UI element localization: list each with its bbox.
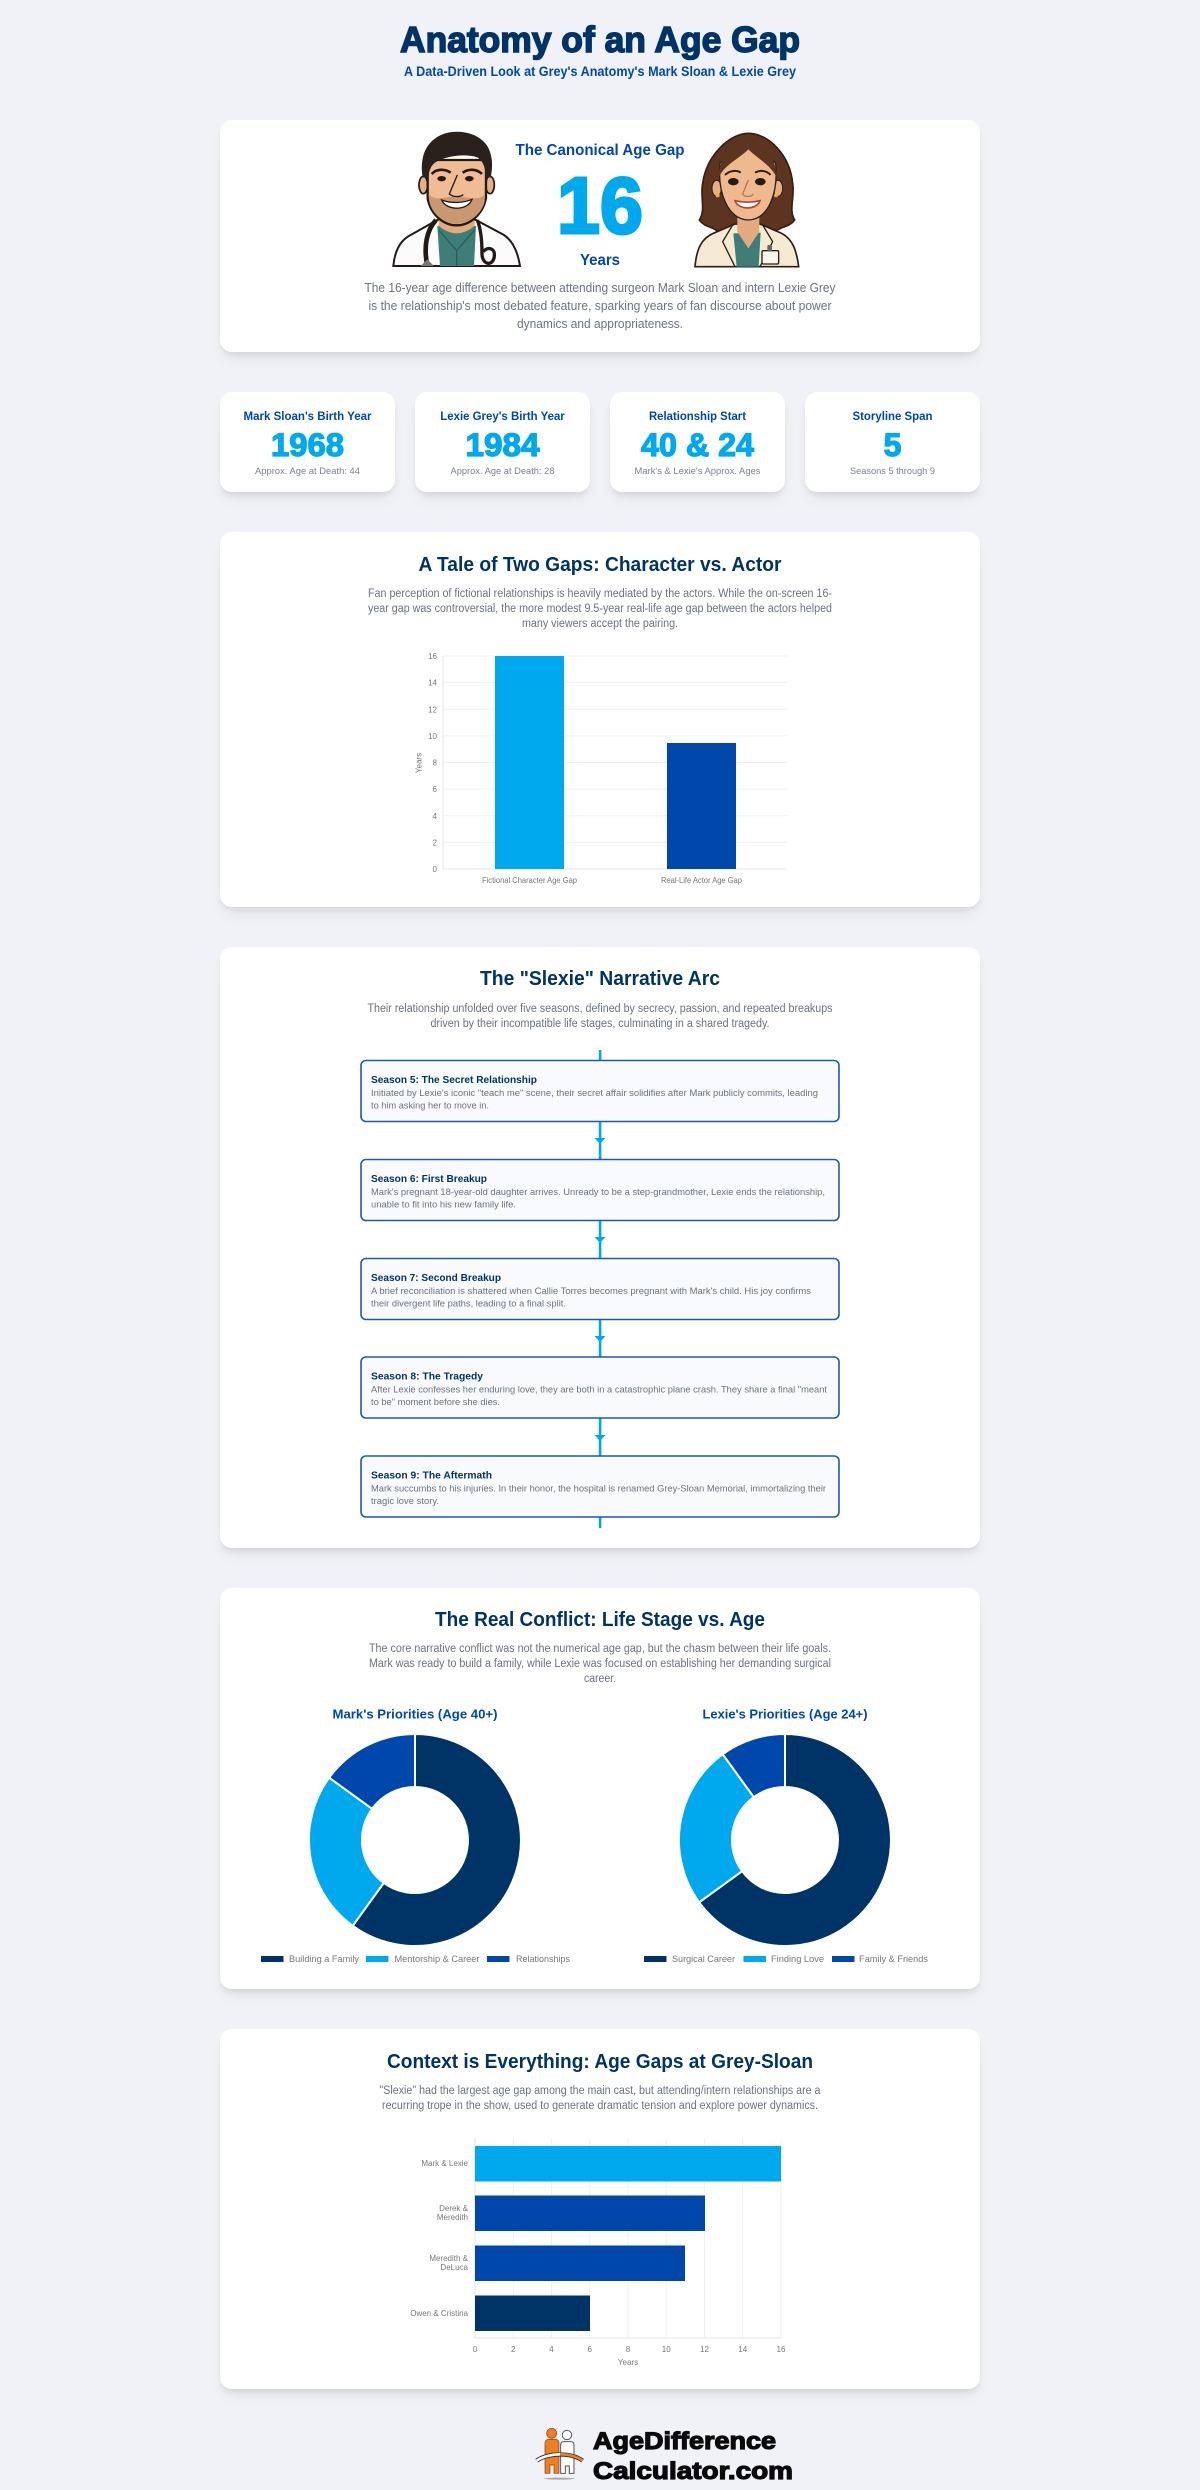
- horizontal bar chart: age gaps: 6: [588, 2345, 593, 2354]
- horizontal bar chart: age gaps: 14: [738, 2345, 748, 2354]
- description: [368, 588, 832, 630]
- description: [368, 1003, 833, 1030]
- donut chart: Lexie's priorities: [644, 1706, 928, 1964]
- timeline item: season 6: Season 6: First Breakup: [371, 1173, 487, 1185]
- horizontal bar chart: age gaps: 16: [777, 2345, 786, 2354]
- panel: canonical age gap: [220, 120, 980, 352]
- bar chart: fictional vs real gap: 16: [428, 652, 438, 661]
- logo text: Calculator.com: [593, 2458, 793, 2485]
- timeline item: season 5: Season 5: The Secret Relationship: [371, 1074, 537, 1086]
- bar chart: fictional vs real gap: 0: [433, 865, 438, 874]
- heading: A Tale of Two Gaps: Character vs. Actor: [418, 554, 782, 576]
- description: dynamics and appropriateness.: [517, 316, 683, 331]
- timeline line and arrows: [594, 1050, 606, 1528]
- timeline item: season 6: Mark's pregnant 18-year-old daughter arrives. Unready to be a step-grandmother, Lexie ends the relationship,: [371, 1187, 825, 1198]
- icon: Lexie Grey avatar: [695, 133, 799, 267]
- description: Their relationship unfolded over five seasons, defined by secrecy, passion, and repeated breakups: [368, 1003, 833, 1015]
- horizontal bar chart: age gaps: 10: [662, 2345, 671, 2354]
- description: recurring trope in the show, used to generate dramatic tension and explore power dynamics.: [382, 2100, 818, 2112]
- header: [400, 19, 800, 79]
- description: many viewers accept the pairing.: [522, 618, 678, 630]
- timeline item: season 7: A brief reconciliation is shattered when Callie Torres becomes pregnant with Mark's child. His joy confirms: [371, 1286, 811, 1297]
- donut chart: Lexie's priorities: Lexie's Priorities (Age 24+): [702, 1706, 868, 1722]
- horizontal bar chart: age gaps: Meredith: [437, 2213, 468, 2222]
- timeline item: season 7: [361, 1258, 839, 1320]
- bar chart: fictional vs real gap: 10: [428, 732, 438, 741]
- stat card: Lexie birth year: Lexie Grey's Birth Year: [440, 411, 565, 423]
- horizontal bar chart: age gaps: 0: [473, 2345, 478, 2354]
- bar chart: fictional vs real gap: 12: [428, 705, 438, 714]
- heading: Context is Everything: Age Gaps at Grey-Sloan: [387, 2051, 813, 2073]
- bar chart: fictional vs real gap: 6: [433, 785, 438, 794]
- description: [380, 2085, 821, 2112]
- timeline item: season 6: unable to fit into his new family life.: [371, 1200, 516, 1210]
- timeline item: season 8: Season 8: The Tragedy: [371, 1370, 483, 1382]
- icon: two people logo: [537, 2428, 583, 2480]
- bar chart: fictional vs real gap: 4: [433, 812, 438, 821]
- donut chart: Lexie's priorities: Surgical Career: [672, 1954, 735, 1964]
- horizontal bar chart: age gaps: Meredith &: [429, 2254, 469, 2263]
- stat card: Mark birth year: [220, 392, 395, 492]
- description: Fan perception of fictional relationships is heavily mediated by the actors. While the on-screen 16-: [368, 588, 832, 600]
- stat card: relationship start: Mark's & Lexie's Approx. Ages: [634, 466, 761, 477]
- bar chart: fictional vs real gap: 2: [433, 838, 438, 847]
- logo text: [593, 2428, 793, 2485]
- panel: age gaps at Grey-Sloan: [220, 2029, 980, 2389]
- stat card: storyline span: 5: [884, 427, 901, 463]
- heading: The Real Conflict: Life Stage vs. Age: [435, 1609, 765, 1631]
- horizontal bar chart: age gaps: DeLuca: [440, 2263, 469, 2272]
- bar chart: fictional vs real gap: Real-Life Actor Age Gap: [661, 876, 743, 885]
- horizontal bar chart: age gaps: Owen & Cristina: [410, 2309, 469, 2318]
- timeline item: season 9: Season 9: The Aftermath: [371, 1470, 492, 1482]
- timeline item: season 9: [361, 1456, 839, 1517]
- description: is the relationship's most debated feature, sparking years of fan discourse about power: [368, 298, 832, 313]
- description: The core narrative conflict was not the numerical age gap, but the chasm between their life goals.: [369, 1643, 831, 1655]
- panel: character vs actor: [220, 532, 980, 907]
- timeline item: season 9: Mark succumbs to his injuries. In their honor, the hospital is renamed Grey-Sloan Memorial, immortalizing their: [371, 1484, 827, 1494]
- label: years: Years: [580, 252, 620, 269]
- stat card: Mark birth year: Mark Sloan's Birth Year: [244, 411, 372, 423]
- description: driven by their incompatible life stages, culminating in a shared tragedy.: [430, 1018, 770, 1030]
- timeline item: season 7: their divergent life paths, leading to a final split.: [371, 1298, 566, 1310]
- big number: 16: 16: [557, 161, 643, 250]
- stat card: relationship start: 40 & 24: [641, 427, 754, 463]
- stat card: storyline span: [805, 392, 980, 492]
- horizontal bar chart: age gaps: 4: [549, 2345, 554, 2354]
- title: Anatomy of an Age Gap: [400, 19, 800, 60]
- timeline item: season 8: to be" moment before she dies.: [371, 1397, 500, 1408]
- description: Mark was ready to build a family, while Lexie was focused on establishing her demanding surgical: [369, 1658, 831, 1670]
- bar chart: fictional vs real gap: [414, 652, 787, 885]
- bar chart: fictional vs real gap: Fictional Character Age Gap: [482, 876, 578, 885]
- description: career.: [584, 1673, 616, 1685]
- bar chart: fictional vs real gap: Years: [414, 753, 424, 773]
- stat card: Lexie birth year: [415, 392, 590, 492]
- horizontal bar chart: age gaps: Derek &: [439, 2204, 469, 2213]
- donut chart: Mark's priorities: Mark's Priorities (Age 40+): [332, 1706, 498, 1722]
- stat card: storyline span: Seasons 5 through 9: [850, 466, 935, 477]
- donut chart: Mark's priorities: Mentorship & Career: [394, 1954, 480, 1964]
- description: [364, 280, 836, 331]
- stat card: relationship start: [610, 392, 785, 492]
- logo text: AgeDifference: [593, 2428, 776, 2455]
- bar chart: fictional vs real gap: 14: [428, 679, 438, 688]
- timeline item: season 9: tragic love story.: [371, 1496, 439, 1507]
- bar chart: fictional vs real gap: 8: [433, 758, 438, 768]
- description: "Slexie" had the largest age gap among the main cast, but attending/intern relationships are a: [380, 2085, 821, 2097]
- timeline item: season 6: [361, 1160, 839, 1220]
- description: year gap was controversial, the more modest 9.5-year real-life age gap between the actors helped: [368, 603, 832, 615]
- stat card: Lexie birth year: Approx. Age at Death: 28: [450, 466, 554, 477]
- stat card: Lexie birth year: 1984: [466, 427, 540, 463]
- panel: narrative arc: [220, 947, 980, 1548]
- horizontal bar chart: age gaps: 8: [626, 2345, 631, 2354]
- timeline item: season 5: to him asking her to move in.: [371, 1100, 489, 1112]
- horizontal bar chart: age gaps: 12: [700, 2345, 709, 2354]
- horizontal bar chart: age gaps: 2: [511, 2345, 516, 2354]
- timeline item: season 5: Initiated by Lexie's iconic "teach me" scene, their secret affair solidifies after Mark publicly commits, leading: [371, 1088, 818, 1099]
- stat card: Mark birth year: 1968: [271, 427, 344, 463]
- donut chart: Mark's priorities: Building a Family: [289, 1954, 359, 1964]
- donut chart: Lexie's priorities: Finding Love: [771, 1954, 824, 1964]
- donut chart: Mark's priorities: [261, 1706, 570, 1964]
- panel: life stage vs age: [220, 1588, 980, 1989]
- subtitle: A Data-Driven Look at Grey's Anatomy's Mark Sloan & Lexie Grey: [404, 64, 796, 79]
- stat card: relationship start: Relationship Start: [649, 411, 746, 423]
- description: [369, 1643, 831, 1685]
- horizontal bar chart: age gaps: [410, 2138, 786, 2367]
- timeline item: season 8: After Lexie confesses her enduring love, they are both in a catastrophic plane crash. They share a final "meant: [371, 1384, 827, 1396]
- stat card: storyline span: Storyline Span: [852, 411, 932, 423]
- description: The 16-year age difference between attending surgeon Mark Sloan and intern Lexie Grey: [364, 280, 836, 295]
- label: canonical age gap: The Canonical Age Gap: [516, 142, 684, 159]
- stat card: Mark birth year: Approx. Age at Death: 44: [255, 466, 360, 477]
- horizontal bar chart: age gaps: Years: [618, 2358, 638, 2367]
- icon: Mark Sloan avatar: [393, 132, 520, 266]
- timeline item: season 8: [361, 1357, 839, 1418]
- horizontal bar chart: age gaps: Mark & Lexie: [421, 2159, 469, 2168]
- heading: The "Slexie" Narrative Arc: [480, 968, 720, 990]
- timeline item: season 7: Season 7: Second Breakup: [371, 1272, 501, 1284]
- donut chart: Lexie's priorities: Family & Friends: [859, 1954, 928, 1964]
- timeline item: season 5: [361, 1060, 839, 1122]
- donut chart: Mark's priorities: Relationships: [516, 1954, 570, 1964]
